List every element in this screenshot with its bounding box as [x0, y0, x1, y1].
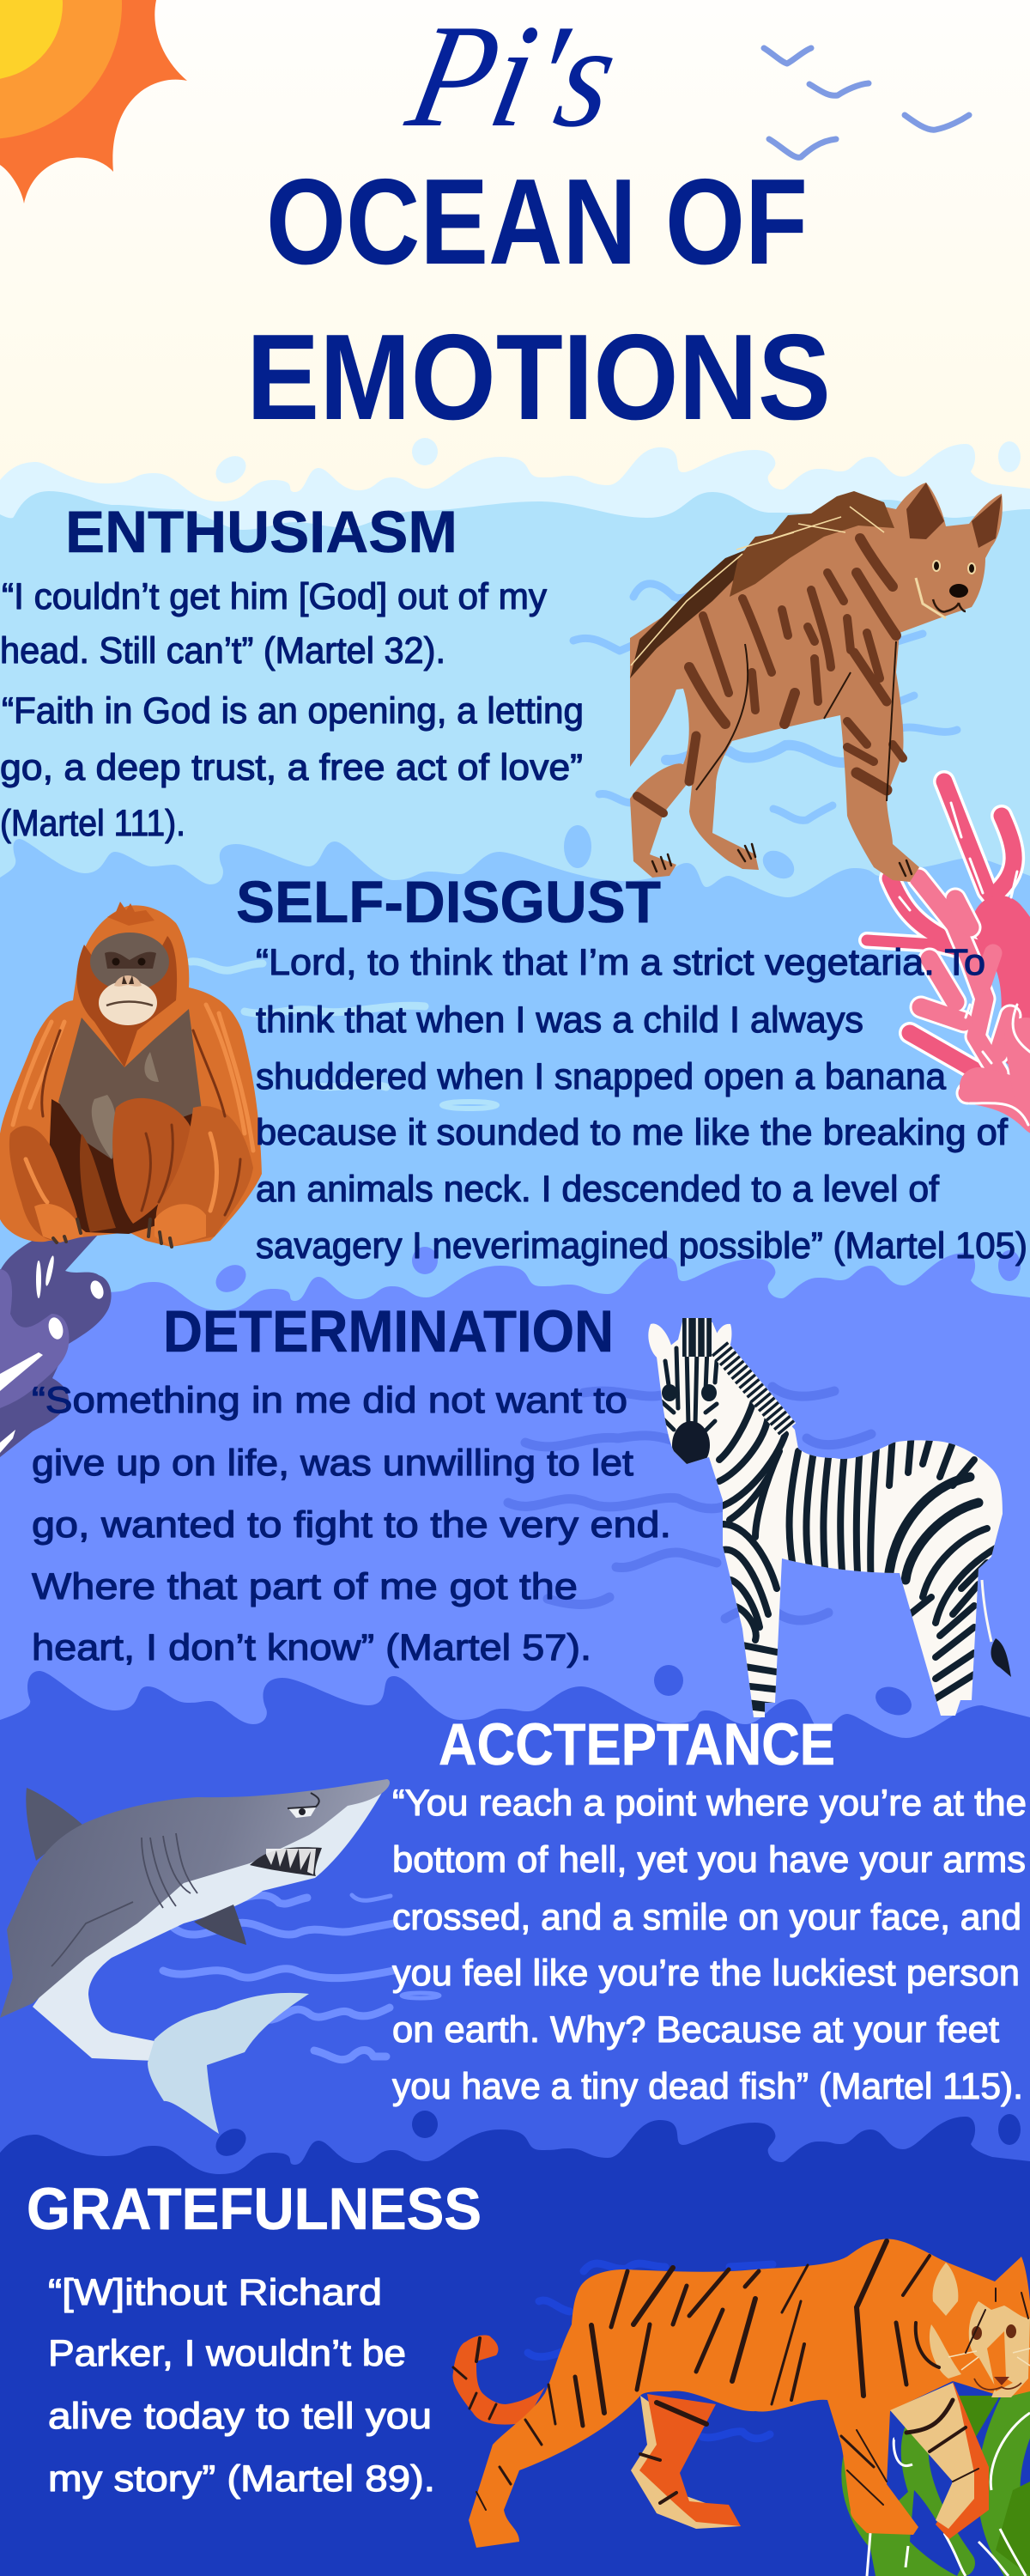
hyena mane highlights	[631, 507, 884, 665]
upper body	[0, 1779, 390, 2018]
band: self-disgust water	[0, 839, 1030, 1374]
section: acceptance quote: you feel like you’re the luckiest person	[392, 1953, 1020, 1994]
section: determination heading: DETERMINATION	[163, 1298, 614, 1364]
hyena stripes	[637, 538, 903, 813]
illustration: shark	[0, 1779, 390, 2134]
hair around face	[76, 936, 177, 1067]
dorsal fin	[26, 1788, 82, 1861]
section: self-disgust quote: savagery I neverimagined possible” (Martel 105)	[256, 1225, 1027, 1267]
section: determination quote: “Something in me did not want to	[32, 1380, 627, 1421]
section: enthusiasm quote: “I couldn’t get him [God] out of my	[2, 576, 547, 617]
tiger head	[930, 2263, 1030, 2397]
squiggles: enthusiasm water	[573, 584, 957, 820]
section: acceptance quote: on earth. Why? Because at your feet	[392, 2009, 999, 2050]
illustration: seaweed	[856, 2396, 1030, 2576]
section: gratefulness quote: “[W]ithout Richard	[48, 2272, 382, 2313]
section: acceptance quote: you have a tiny dead fish” (Martel 115).	[392, 2066, 1023, 2107]
illustration: hyena	[630, 483, 1003, 882]
left arm	[9, 1126, 78, 1241]
illustration: tiger	[452, 2239, 1030, 2548]
lower body shadow	[47, 1099, 210, 1234]
eye	[288, 1793, 319, 1818]
blobs: self-disgust water	[564, 825, 799, 884]
mouth	[250, 1847, 322, 1876]
illustration: pink coral	[867, 781, 1030, 1125]
tiger front leg	[936, 2381, 989, 2539]
tiger tail	[452, 2335, 545, 2425]
section: gratefulness quote	[48, 2272, 435, 2500]
zebra muzzle	[672, 1421, 710, 1464]
band: acceptance water	[0, 1665, 1030, 2181]
face	[90, 933, 169, 991]
title: EMOTIONS: EMOTIONS	[246, 309, 831, 446]
section: self-disgust quote: think that when I was a child I always	[256, 999, 863, 1041]
band: enthusiasm water	[0, 491, 1030, 945]
section: determination quote: go, wanted to fight to the very end.	[32, 1504, 671, 1546]
muzzle	[99, 981, 157, 1025]
belly fur	[112, 1098, 193, 1224]
squiggles: determination water	[508, 1387, 871, 1620]
coral light lobe	[0, 1269, 69, 1408]
hyena ears	[906, 483, 1002, 548]
hyena lines	[696, 599, 966, 801]
hyena mane	[630, 550, 747, 678]
fur silhouette	[0, 905, 262, 1247]
zebra mane	[688, 1318, 788, 1430]
chest	[58, 1009, 202, 1159]
squiggles: acceptance water	[163, 1895, 439, 2060]
section: acceptance heading: ACCTEPTANCE	[439, 1711, 835, 1777]
section: acceptance quote: crossed, and a smile on your face, and	[392, 1897, 1021, 1938]
section: self-disgust quote: an animals neck. I descended to a level of	[256, 1169, 940, 1210]
title: OCEAN OF: OCEAN OF	[266, 154, 808, 290]
section: self-disgust quote	[256, 942, 1027, 1267]
coral dark lobe	[0, 1202, 112, 1457]
band: gratefulness water	[0, 2111, 1030, 2576]
illustration: orangutan	[0, 902, 262, 1247]
section: determination quote	[32, 1380, 671, 1668]
section: determination quote: Where that part of me got the	[32, 1566, 578, 1607]
hyena face	[916, 560, 976, 618]
section: acceptance quote	[392, 1783, 1027, 2107]
section: acceptance quote: “You reach a point where you’re at the	[392, 1783, 1027, 1824]
section: enthusiasm quote	[0, 576, 584, 844]
section: gratefulness quote: alive today to tell you	[48, 2396, 432, 2437]
squiggles: self-disgust water	[191, 962, 497, 1109]
head tuft	[107, 902, 154, 926]
section: determination quote: give up on life, was unwilling to let	[32, 1443, 633, 1484]
section: self-disgust heading: SELF-DISGUST	[236, 869, 661, 935]
illustration: zebra	[644, 1305, 1021, 1726]
gills	[52, 1833, 197, 1966]
section: enthusiasm heading: ENTHUSIASM	[65, 499, 457, 565]
band: lightest water	[0, 438, 1030, 903]
section: acceptance quote: bottom of hell, yet you have your arms	[392, 1839, 1026, 1880]
right arm	[156, 1106, 253, 1245]
tiger body	[469, 2239, 1030, 2548]
band: determination water	[0, 1247, 1030, 1760]
hyena claws	[652, 844, 912, 876]
pectoral fin	[194, 1905, 246, 1945]
coral highlights	[0, 1255, 106, 1453]
fur strokes	[13, 1005, 253, 1211]
background: cream sky	[0, 0, 1030, 532]
section: enthusiasm quote: head. Still can’t” (Martel 32).	[0, 630, 445, 671]
section: gratefulness heading: GRATEFULNESS	[27, 2176, 482, 2242]
section: self-disgust quote: because it sounded to me like the breaking of	[256, 1112, 1009, 1153]
zebra tail	[982, 1580, 1011, 1677]
icon: sun	[0, 0, 187, 204]
tail and belly	[33, 1783, 387, 2061]
illustration: purple coral	[0, 1202, 112, 1457]
section: self-disgust quote: “Lord, to think that I’m a strict vegetaria. To	[256, 942, 985, 983]
feet	[34, 1204, 206, 1247]
section: gratefulness quote: Parker, I wouldn’t be	[48, 2333, 406, 2374]
section: enthusiasm quote: “Faith in God is an opening, a letting	[2, 690, 584, 732]
icon: birds	[764, 48, 969, 157]
tiger back leg	[631, 2396, 741, 2529]
squiggles: gratefulness water	[528, 2263, 772, 2439]
zebra body	[657, 1322, 1003, 1717]
hyena body	[630, 483, 1003, 882]
section: self-disgust quote: shuddered when I snapped open a banana	[256, 1056, 946, 1097]
claws	[53, 1219, 172, 1247]
tail fin	[148, 1993, 309, 2134]
zebra ears	[648, 1324, 731, 1358]
tiger stripes	[453, 2241, 1028, 2510]
section: determination quote: heart, I don’t know” (Martel 57).	[32, 1627, 591, 1668]
section: enthusiasm quote: (Martel 111).	[0, 803, 185, 844]
section: enthusiasm quote: go, a deep trust, a free act of love”	[0, 747, 583, 788]
section: gratefulness quote: my story” (Martel 89).	[48, 2458, 435, 2500]
